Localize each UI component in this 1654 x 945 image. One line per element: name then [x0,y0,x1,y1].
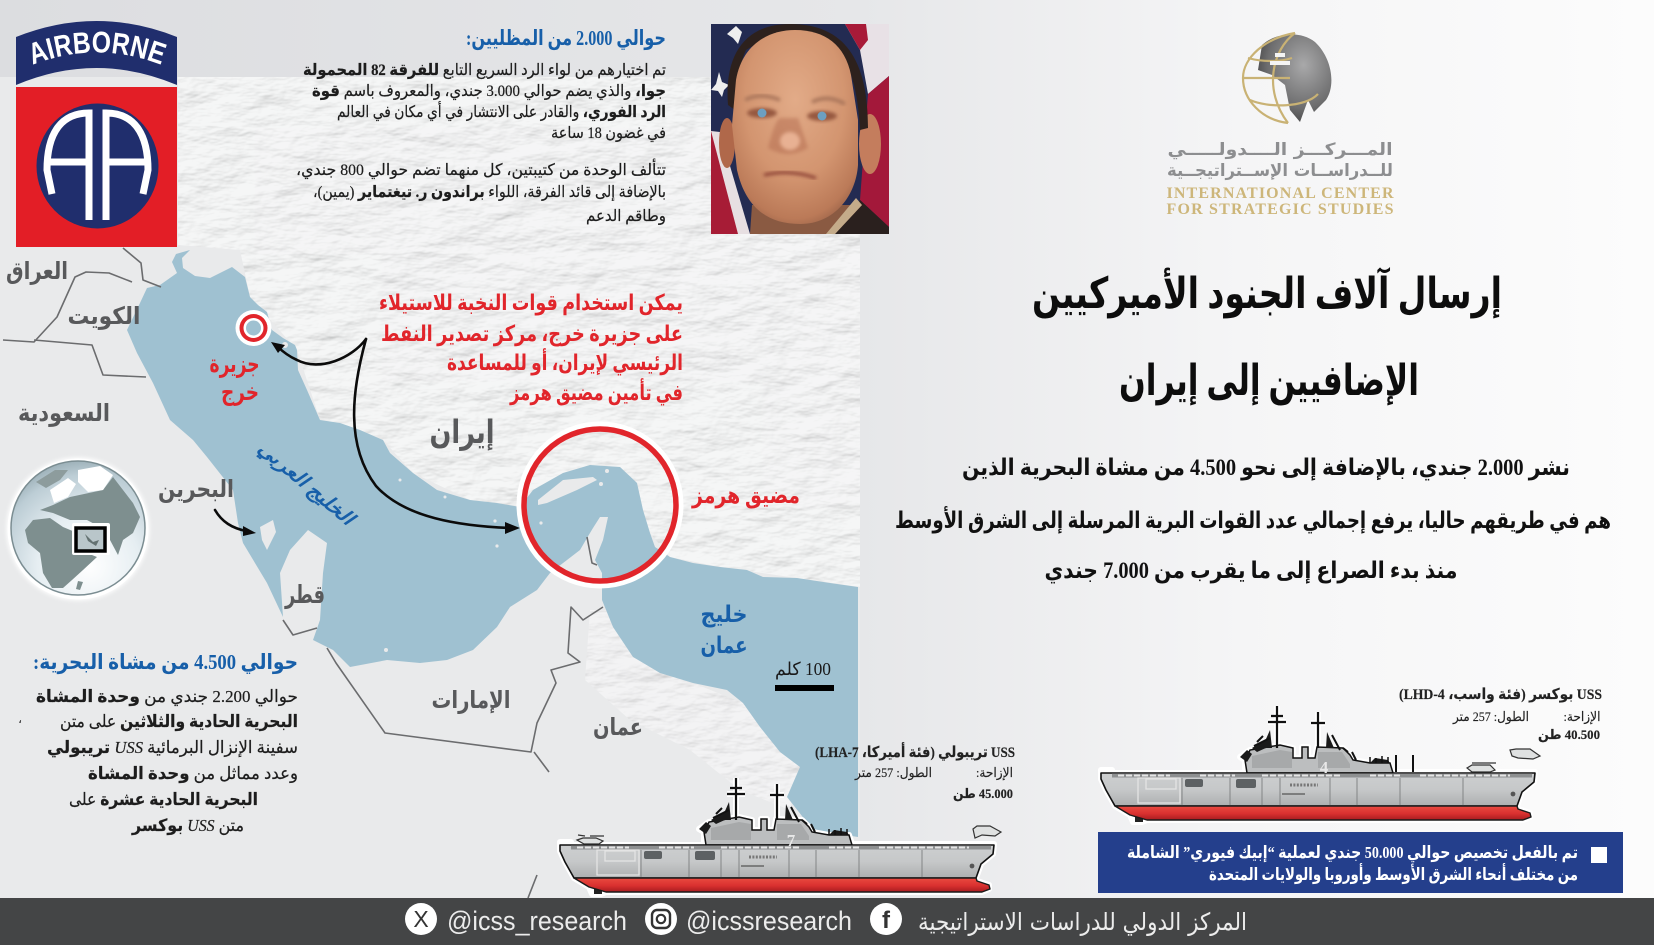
arrow: callout to Strait of Hormuz [354,339,520,534]
note box: Epic Fury [1098,832,1623,893]
label: Kharg Island: خرج [221,380,259,406]
body: paragraph one: الرد الفوري، والقادر على الانتشار في أي مكان في العالم [337,101,666,122]
body: marines: البحرية الحادية والثلاثين على متن [60,712,298,732]
body: marines: وعدد مماثل من وحدة المشاة [88,764,298,784]
badge AIRBORNE tab: AIRBORNE [32,32,167,64]
eyes [747,108,837,121]
sea label: Gulf of Oman: عمان [700,633,748,658]
marker: Kharg Island [236,310,272,346]
sea label: Gulf of Oman: خليج [700,602,748,628]
globe locator square [72,523,110,555]
circle: Strait of Hormuz [521,426,679,584]
icon: Facebook [870,903,902,935]
heading: paratroopers: حوالي 2.000 من المظليين: [466,26,666,50]
body: paragraph one: تم اختيارهم من لواء الرد السريع التابع للفرقة 82 المحمولة [303,62,666,80]
specs: USS Tripoli: USS تريبولي (فئة أميركا، LHA-7) [815,742,1015,761]
logo English name [1166,185,1394,218]
note bullet [1591,847,1607,863]
body: paragraph one: في غضون 18 ساعة [551,125,666,143]
uniform [835,200,889,234]
title: الإضافيين إلى إيران [1119,358,1419,406]
specs: USS Boxer [1399,687,1602,742]
title: إرسال آلاف الجنود الأميركيين [1032,267,1502,319]
country label: Oman: عمان [593,713,643,741]
map of the Gulf [0,77,860,898]
logo Arabic name [1167,140,1393,181]
label: Kharg Island: جزيرة [210,352,260,378]
brows [745,96,845,104]
label: Kharg Island [210,352,260,406]
hair [728,24,868,130]
badge: 82nd Airborne [16,21,177,247]
aircraft in flight [1510,749,1540,759]
body: paragraph two: بالإضافة إلى قائد الفرقة، اللواء براندون ر. تيغتماير (يمين)، [313,184,666,202]
country label: Bahrain: البحرين [158,475,234,503]
label: Strait of Hormuz: مضيق هرمز [691,483,800,509]
intro text [895,455,1611,584]
footer bar [0,898,1654,945]
water: Arabian Gulf and Gulf of Oman [127,250,858,837]
nose [768,118,808,154]
body: marines [36,687,298,836]
specs: USS Boxer: USS بوكسر (فئة واسب، LHD-4) [1399,687,1602,703]
logo English name: FOR STRATEGIC STUDIES [1166,201,1394,218]
text block: marines [18,650,298,836]
scale bar [775,659,834,691]
badge AA roundel [36,104,158,228]
intro text: نشر 2.000 جندي، بالإضافة إلى نحو 4.500 من مشاة البحرية الذين [962,455,1570,481]
body: paragraph one: جوا، والذي يضم حوالي 3.000 جندي، والمعروف باسم قوة [312,83,666,101]
scale bar: 100 كلم [775,659,831,680]
globe landmass [25,518,97,588]
badge red field [16,87,177,247]
body: marines: متن USS بوكسر [131,816,244,836]
logo Arabic name: المـــركـــز الــــدولـــــي [1168,140,1392,160]
body: marines: البحرية الحادية عشرة على [69,790,258,810]
callout: elite forces: يمكن استخدام قوات النخبة للاستيلاء [379,290,683,316]
specs: USS Tripoli: 45.000 طن [953,786,1013,801]
text block: paratroopers [296,26,666,226]
terrain shading: Oman mountains [586,610,800,808]
aircraft on deck [1467,763,1496,772]
collar and neck [750,205,862,234]
island: Bahrain [260,520,276,550]
country label: UAE: الإمارات [432,686,510,714]
portrait photo [711,24,889,234]
note text: تم بالفعل تخصيص حوالي 50.000 جندي لعملية “إبيك فيوري” الشاملة [1127,843,1578,863]
island dots [282,342,609,652]
body: paragraph two [296,158,666,226]
heading: marines: حوالي 4.500 من مشاة البحرية: [33,650,298,674]
body: marines: حوالي 2.200 جندي من وحدة المشاة [36,687,298,707]
handle: Instagram: @icssresearch [686,906,852,936]
specs: USS Boxer: 40.500 طن [1538,727,1600,742]
face [732,30,858,224]
terrain shading: Iran [170,77,860,592]
callout: elite forces: على جزيرة خرج، مركز تصدير النفط [381,321,683,347]
body: paragraph one [303,62,666,143]
sea label: Gulf of Oman [700,602,748,658]
island: Qeshm [538,477,597,505]
sea label: Arabian Gulf: الخليج العربي [254,438,360,532]
specs: USS Tripoli: الإزاحة: [976,765,1013,781]
stray comma: ، [18,712,22,726]
logo English name: INTERNATIONAL CENTER [1166,185,1394,202]
ship: USS Tripoli [560,778,1001,894]
icon: Facebook: f [882,907,891,934]
hull number 4: 4 [1320,758,1329,777]
note text [1127,843,1578,885]
handle: X: @icss_research [447,906,627,936]
country label: Iraq: العراق [6,257,68,285]
callout: elite forces [379,290,683,406]
mouth [764,173,816,178]
aircraft above bow [973,826,1001,838]
ship: USS Boxer [1101,706,1540,822]
logo globe [1243,33,1331,123]
flag backdrop [711,24,889,234]
specs: USS Tripoli: الطول: 257 متر [854,765,932,781]
specs: USS Boxer: الطول: 257 متر [1452,709,1529,725]
locator globe [6,457,150,601]
icon: X: X [413,906,429,932]
country borders [3,248,603,898]
country label: Iran: إيران [430,413,494,452]
ears [719,118,735,168]
specs: USS Tripoli [815,742,1015,801]
body: paragraph two: وطاقم الدعم [586,208,666,226]
badge AIRBORNE tab [16,21,177,85]
logo Arabic name: للــدراســات الإســتراتيجــية [1167,161,1393,181]
country label: Saudi Arabia: السعودية [18,399,110,427]
country label: Kuwait: الكويت [68,302,140,330]
deck posts [1396,755,1413,772]
callout: elite forces: في تأمين مضيق هرمز [509,377,683,406]
hull number 7: 7 [787,831,796,850]
specs: USS Boxer: الإزاحة: [1564,709,1600,725]
country label: Qatar: قطر [284,580,325,610]
title [1032,267,1502,406]
icon: Instagram [645,903,677,935]
logo: ICSS [1166,33,1394,218]
arrow: Bahrain [215,510,256,536]
aircraft on deck [577,835,604,844]
intro text: منذ بدء الصراع إلى ما يقرب من 7.000 جندي [1044,558,1458,584]
body: marines: سفينة الإنزال البرمائية USS تريبولي [47,738,298,758]
arrow: callout to Kharg Island [271,339,366,364]
callout: elite forces: الرئيسي لإيران، أو للمساعدة [447,347,683,376]
icon: X [405,903,437,935]
footer organisation name: المركز الدولي للدراسات الاستراتيجية [918,908,1247,936]
body: paragraph two: تتألف الوحدة من كتيبتين، كل منهما تضم حوالي 800 جندي، [296,158,666,180]
